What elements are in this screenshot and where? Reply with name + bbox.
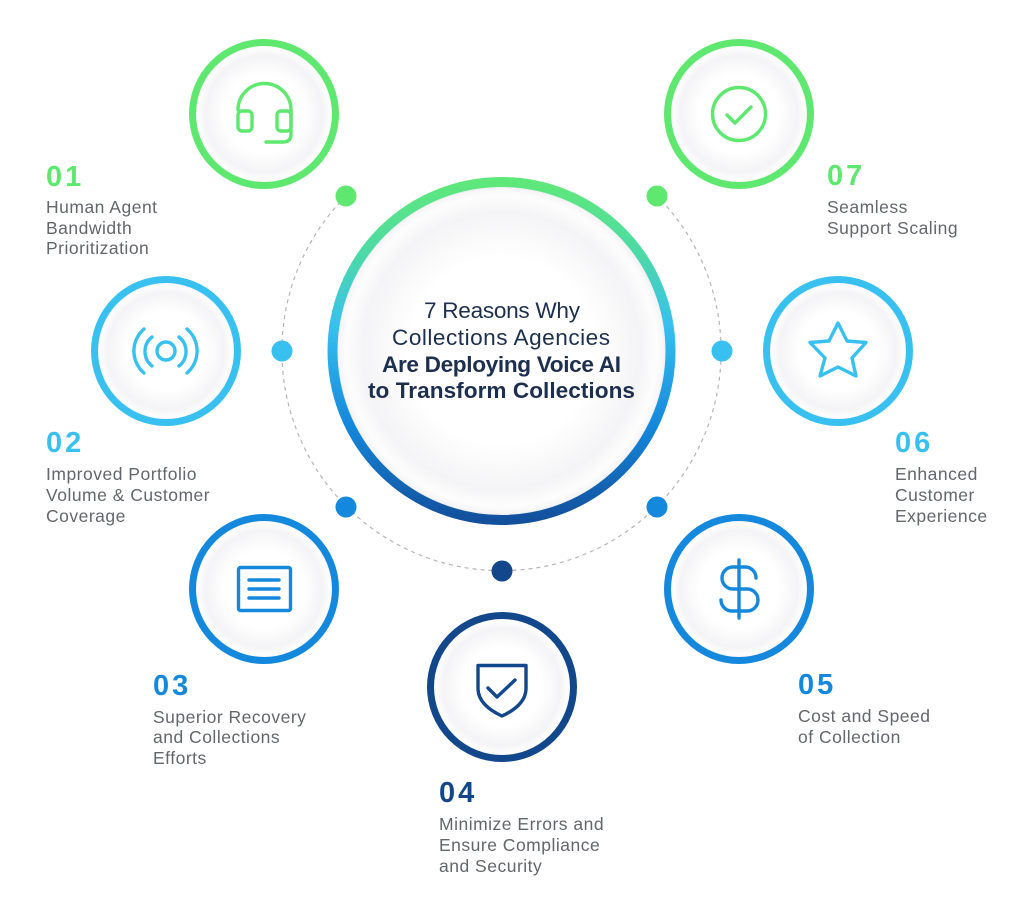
reason 06 badge — [766, 280, 910, 422]
reason 04 text: Ensure Compliance — [439, 835, 600, 855]
reason 01 text: Human Agent — [46, 197, 158, 217]
central panel — [332, 182, 670, 520]
reason 03 text — [153, 670, 306, 768]
reason 05 text: Cost and Speed — [798, 706, 931, 726]
reason 04 text: 04 — [439, 777, 477, 809]
reason 04 text: Minimize Errors and — [439, 814, 604, 834]
central title — [368, 298, 635, 403]
reason 05 text: 05 — [798, 669, 836, 701]
icon: document lines — [238, 568, 290, 610]
connector dot 1 — [336, 186, 356, 206]
reason 03 text: and Collections — [153, 727, 280, 747]
connector dot 5 — [646, 496, 668, 518]
reason 06 text: Customer — [895, 485, 975, 505]
reason 02 text: Coverage — [46, 506, 126, 526]
connector dot 4 — [492, 560, 512, 582]
connector dot 2 — [272, 340, 292, 362]
reason 06 text: Experience — [895, 506, 988, 526]
icon: check circle — [712, 88, 766, 140]
icon: headset — [238, 84, 291, 142]
reason 04 text — [439, 777, 604, 876]
icon: shield check — [478, 666, 526, 716]
icon: dollar sign — [721, 560, 758, 618]
reason 05 badge — [668, 518, 810, 660]
reason 02 text: Improved Portfolio — [46, 464, 197, 484]
reason 03 text: 03 — [153, 670, 191, 702]
reason 07 text — [827, 160, 958, 238]
icon: broadcast signal — [134, 329, 197, 373]
reason 03 text: Superior Recovery — [153, 707, 306, 727]
reason 01 text: Prioritization — [46, 238, 149, 258]
reason 01 text: Bandwidth — [46, 218, 132, 238]
reason 02 text: Volume & Customer — [46, 485, 210, 505]
reason 07 text: Seamless — [827, 197, 908, 217]
central title: to Transform Collections — [368, 378, 635, 403]
reason 06 text: 06 — [895, 427, 933, 459]
reason 05 text: of Collection — [798, 727, 901, 747]
reason 01 text: 01 — [46, 161, 84, 193]
reason 01 badge — [192, 42, 336, 186]
reason 07 badge — [668, 42, 810, 186]
reason 04 badge — [430, 616, 574, 758]
dashed connector arc — [282, 196, 721, 571]
reason 03 badge — [192, 518, 336, 660]
connector dot 3 — [336, 496, 356, 518]
reason 02 badge — [94, 280, 238, 422]
central title: Collections Agencies — [392, 325, 610, 350]
reason 02 text: 02 — [46, 427, 84, 459]
reason 06 text — [895, 427, 988, 526]
reason 07 text: Support Scaling — [827, 218, 958, 238]
connector dot 7 — [646, 186, 668, 206]
central title: Are Deploying Voice AI — [382, 352, 621, 377]
reason 02 text — [46, 427, 210, 526]
reason 04 text: and Security — [439, 856, 542, 876]
reason 01 text — [46, 161, 158, 258]
central title: 7 Reasons Why — [424, 298, 581, 323]
reason 07 text: 07 — [827, 160, 865, 192]
connector dot 6 — [712, 340, 732, 362]
reason 06 text: Enhanced — [895, 464, 978, 484]
reason 05 text — [798, 669, 931, 747]
reason 03 text: Efforts — [153, 748, 207, 768]
icon: star — [810, 323, 866, 376]
